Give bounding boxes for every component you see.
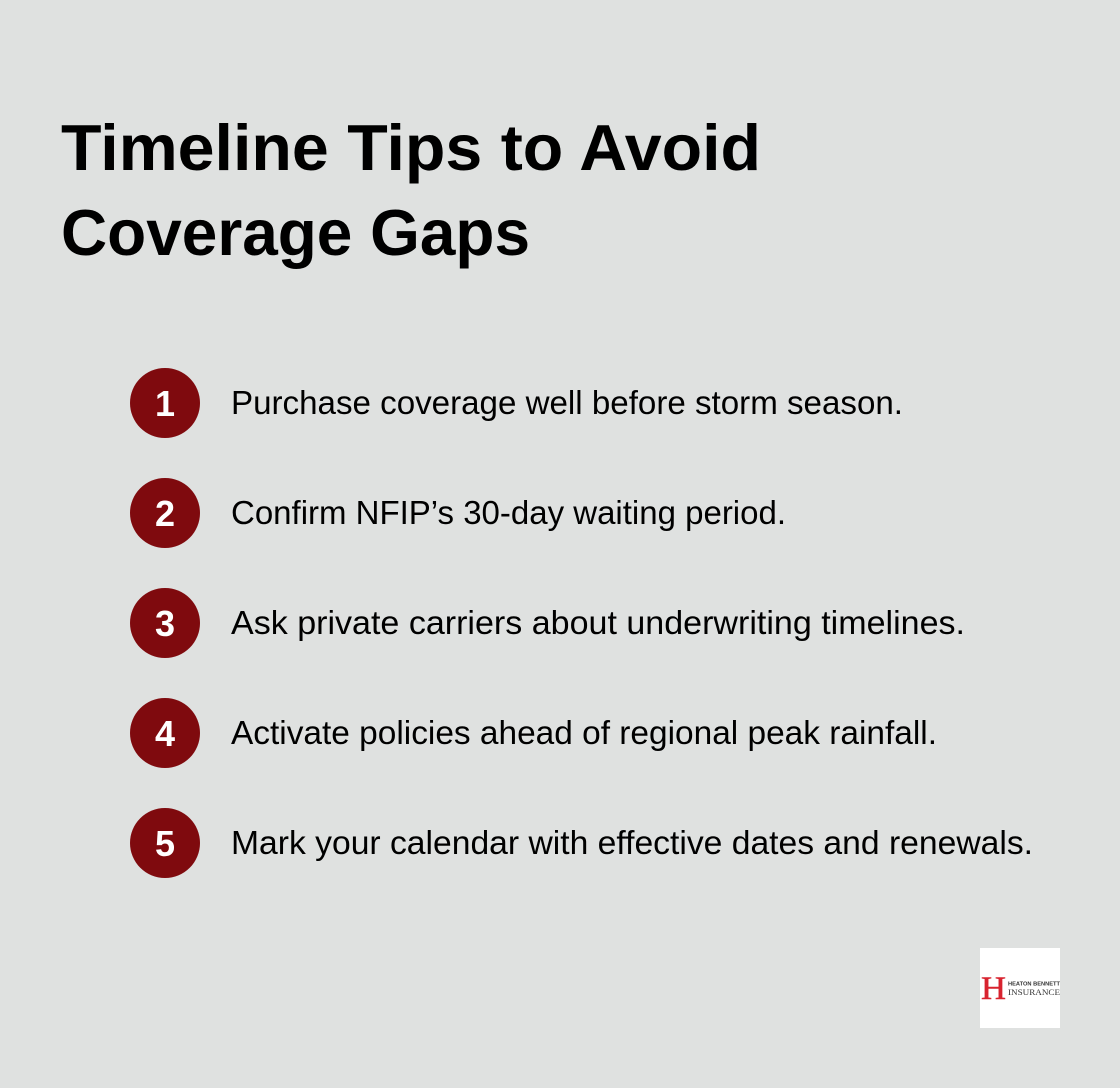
tip 3: Ask private carriers about underwriting timelines.: [231, 604, 965, 641]
logo: Heaton Bennett Insurance: [980, 948, 1061, 1028]
list of timeline tips: [130, 368, 1033, 878]
tip 4: Activate policies ahead of regional peak rainfall.: [231, 714, 937, 751]
tip 5: 5: [155, 823, 175, 864]
tip 2: 2: [155, 493, 175, 534]
tip 1: 1: [155, 383, 175, 424]
title: [61, 111, 761, 269]
tip 3: [130, 588, 965, 658]
tip 4: [130, 698, 937, 768]
tip 1: [130, 368, 903, 438]
tip 2: [130, 478, 786, 548]
tip 5: Mark your calendar with effective dates and renewals.: [231, 824, 1033, 861]
tip 1: Purchase coverage well before storm season.: [231, 384, 903, 421]
title: Coverage Gaps: [61, 196, 530, 269]
tip 3: 3: [155, 603, 175, 644]
title: Timeline Tips to Avoid: [61, 111, 761, 184]
logo: Heaton Bennett Insurance: HEATON BENNETT: [1008, 982, 1061, 988]
logo: Heaton Bennett Insurance: H: [981, 971, 1006, 1007]
tip 2: Confirm NFIP’s 30-day waiting period.: [231, 494, 786, 531]
tip 4: 4: [155, 713, 175, 754]
logo: Heaton Bennett Insurance: INSURANCE: [1008, 988, 1060, 997]
tip 5: [130, 808, 1033, 878]
